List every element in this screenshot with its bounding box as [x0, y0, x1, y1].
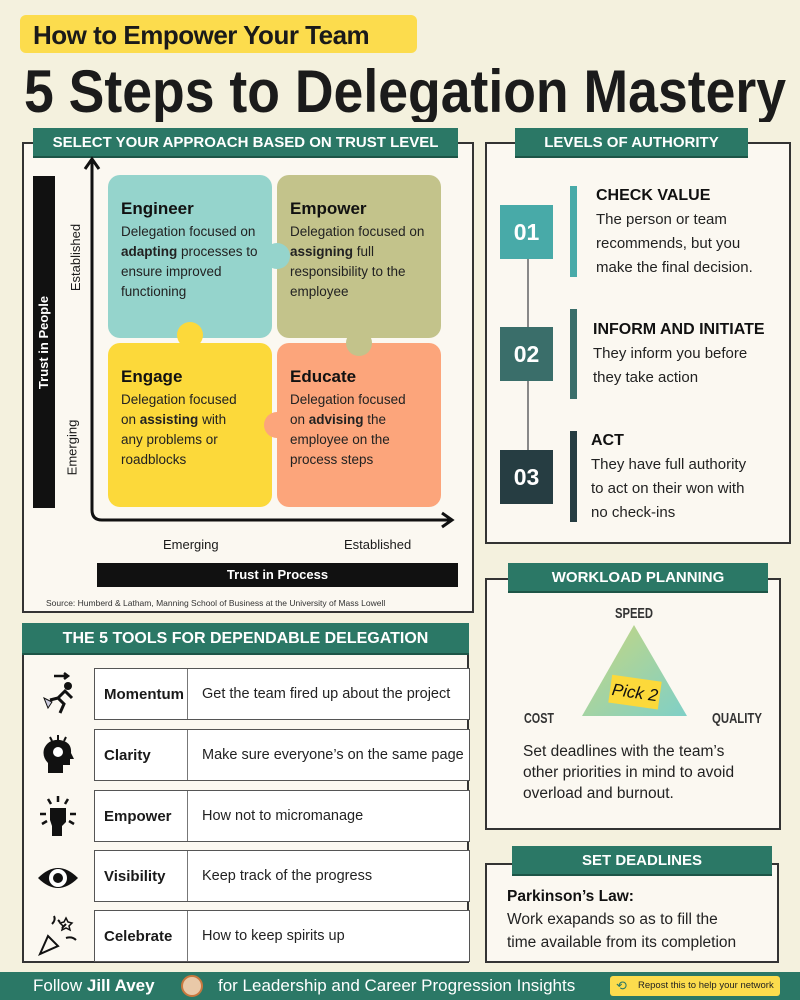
tool: celebrate: How to keep spirits up [202, 928, 345, 944]
panel: set deadlines [485, 863, 779, 963]
workload text: other priorities in mind to avoid [523, 764, 734, 781]
tool: empower [94, 790, 470, 842]
header: levels of authority [515, 128, 748, 158]
icon: runner [43, 672, 73, 714]
tool: momentum: Get the team fired up about the project [202, 686, 450, 702]
tool: momentum: Momentum [104, 686, 184, 702]
y axis bar label: Trust in People [36, 295, 52, 389]
x axis ticks: Emerging [163, 537, 219, 552]
footer: follow text: Follow Jill Avey [33, 976, 155, 995]
quadrant: Empower [277, 175, 441, 338]
quadrant: Engage [108, 343, 272, 507]
header: workload planning [508, 563, 768, 593]
panel: trust level quadrant [22, 142, 474, 613]
parkinson text: time available from its completion [507, 934, 736, 951]
level 01: 01 [514, 218, 539, 244]
tool: visibility: Keep track of the progress [202, 868, 372, 884]
text: CHECK VALUE [596, 187, 710, 204]
y axis ticks: Established [68, 224, 83, 291]
parkinson text [507, 888, 736, 951]
axes arrows [84, 156, 454, 528]
text: They inform you before [593, 345, 747, 362]
repost button [610, 976, 780, 996]
subtitle badge: How to Empower Your Team [33, 20, 369, 50]
quadrant: Educate: Delegation focused on advising the employee on the process steps [290, 392, 406, 467]
header: 5 tools [22, 623, 469, 655]
quadrant: Empower: Delegation focused on assigning full responsibility to the employee [290, 224, 424, 299]
quadrant: Engage: Delegation focused on assisting with any problems or roadblocks [121, 392, 237, 467]
quadrant: Engineer: Engineer [121, 199, 194, 218]
tool: empower: Empower [104, 808, 172, 824]
footer: insights text: for Leadership and Career Progression Insights [218, 976, 575, 995]
footer [0, 972, 800, 1000]
quadrant: Engage: Engage [121, 367, 182, 386]
parkinson text: Work exapands so as to fill the [507, 911, 718, 928]
panel: levels of authority [485, 142, 791, 544]
quadrant: Engineer: Delegation focused on adapting processes to ensure improved functioning [121, 224, 258, 299]
source note: Source: Humberd & Latham, Manning School of Business at the University of Mass Lowell [46, 598, 385, 608]
icon: fist [40, 796, 76, 836]
workload text: Set deadlines with the team’s [523, 743, 724, 760]
header: 5 tools: THE 5 TOOLS FOR DEPENDABLE DELEGATION [63, 630, 428, 647]
repost button: ⟲ [616, 978, 627, 993]
triangle pick 2: Pick 2 [611, 680, 660, 705]
tool: visibility [94, 850, 470, 902]
x axis bar label: Trust in Process [227, 567, 328, 582]
tool: clarity [94, 729, 470, 781]
level 01 [500, 205, 553, 259]
header: levels of authority: LEVELS OF AUTHORITY [544, 134, 719, 151]
text: to act on their won with [591, 480, 744, 497]
header: select approach: SELECT YOUR APPROACH BASED ON TRUST LEVEL [53, 134, 438, 151]
triangle pick 2: COST [524, 710, 554, 727]
header: set deadlines [512, 846, 772, 876]
panel: workload planning [485, 578, 781, 830]
tool: momentum [94, 668, 470, 720]
subtitle badge [20, 15, 417, 53]
quadrant: Empower: Empower [290, 199, 367, 218]
tool: clarity: Make sure everyone’s on the same page [202, 747, 464, 763]
repost button: Repost this to help your network [638, 980, 774, 991]
panel: 5 tools [22, 625, 469, 963]
x axis bar label [97, 563, 458, 587]
quadrant: Engineer [108, 175, 272, 338]
tool: clarity: Clarity [104, 746, 151, 764]
tool: empower: How not to micromanage [202, 808, 363, 824]
text: Established [344, 537, 411, 552]
tool: visibility: Visibility [104, 868, 165, 884]
icon: avatar [181, 975, 203, 997]
text: make the final decision. [596, 259, 753, 276]
text: Emerging [64, 420, 79, 475]
tool: celebrate [94, 910, 470, 962]
tool: celebrate: Celebrate [104, 928, 172, 944]
level 03 [500, 450, 553, 504]
workload text: overload and burnout. [523, 785, 674, 802]
text: recommends, but you [596, 235, 740, 252]
text: INFORM AND INITIATE [593, 321, 765, 338]
text: The person or team [596, 211, 727, 228]
header: select approach [33, 128, 458, 158]
text: ACT [591, 432, 624, 449]
quadrant: Educate [277, 343, 441, 507]
workload text [523, 743, 734, 802]
level 03: 03 [514, 464, 539, 490]
header: set deadlines: SET DEADLINES [582, 852, 702, 869]
triangle pick 2 [524, 605, 762, 727]
triangle pick 2: SPEED [615, 605, 653, 622]
header: workload planning: WORKLOAD PLANNING [552, 569, 724, 586]
parkinson text: Parkinson’s Law: [507, 888, 634, 905]
y axis bar label [33, 176, 55, 508]
level 02: 02 [514, 340, 539, 366]
icon: head gear [44, 735, 74, 773]
text: They have full authority [591, 456, 746, 473]
icon: eye [38, 868, 78, 888]
icon: party popper [38, 916, 77, 956]
text: no check-ins [591, 504, 675, 521]
text: they take action [593, 369, 698, 386]
level 02 [500, 327, 553, 381]
quadrant: Educate: Educate [290, 367, 356, 386]
